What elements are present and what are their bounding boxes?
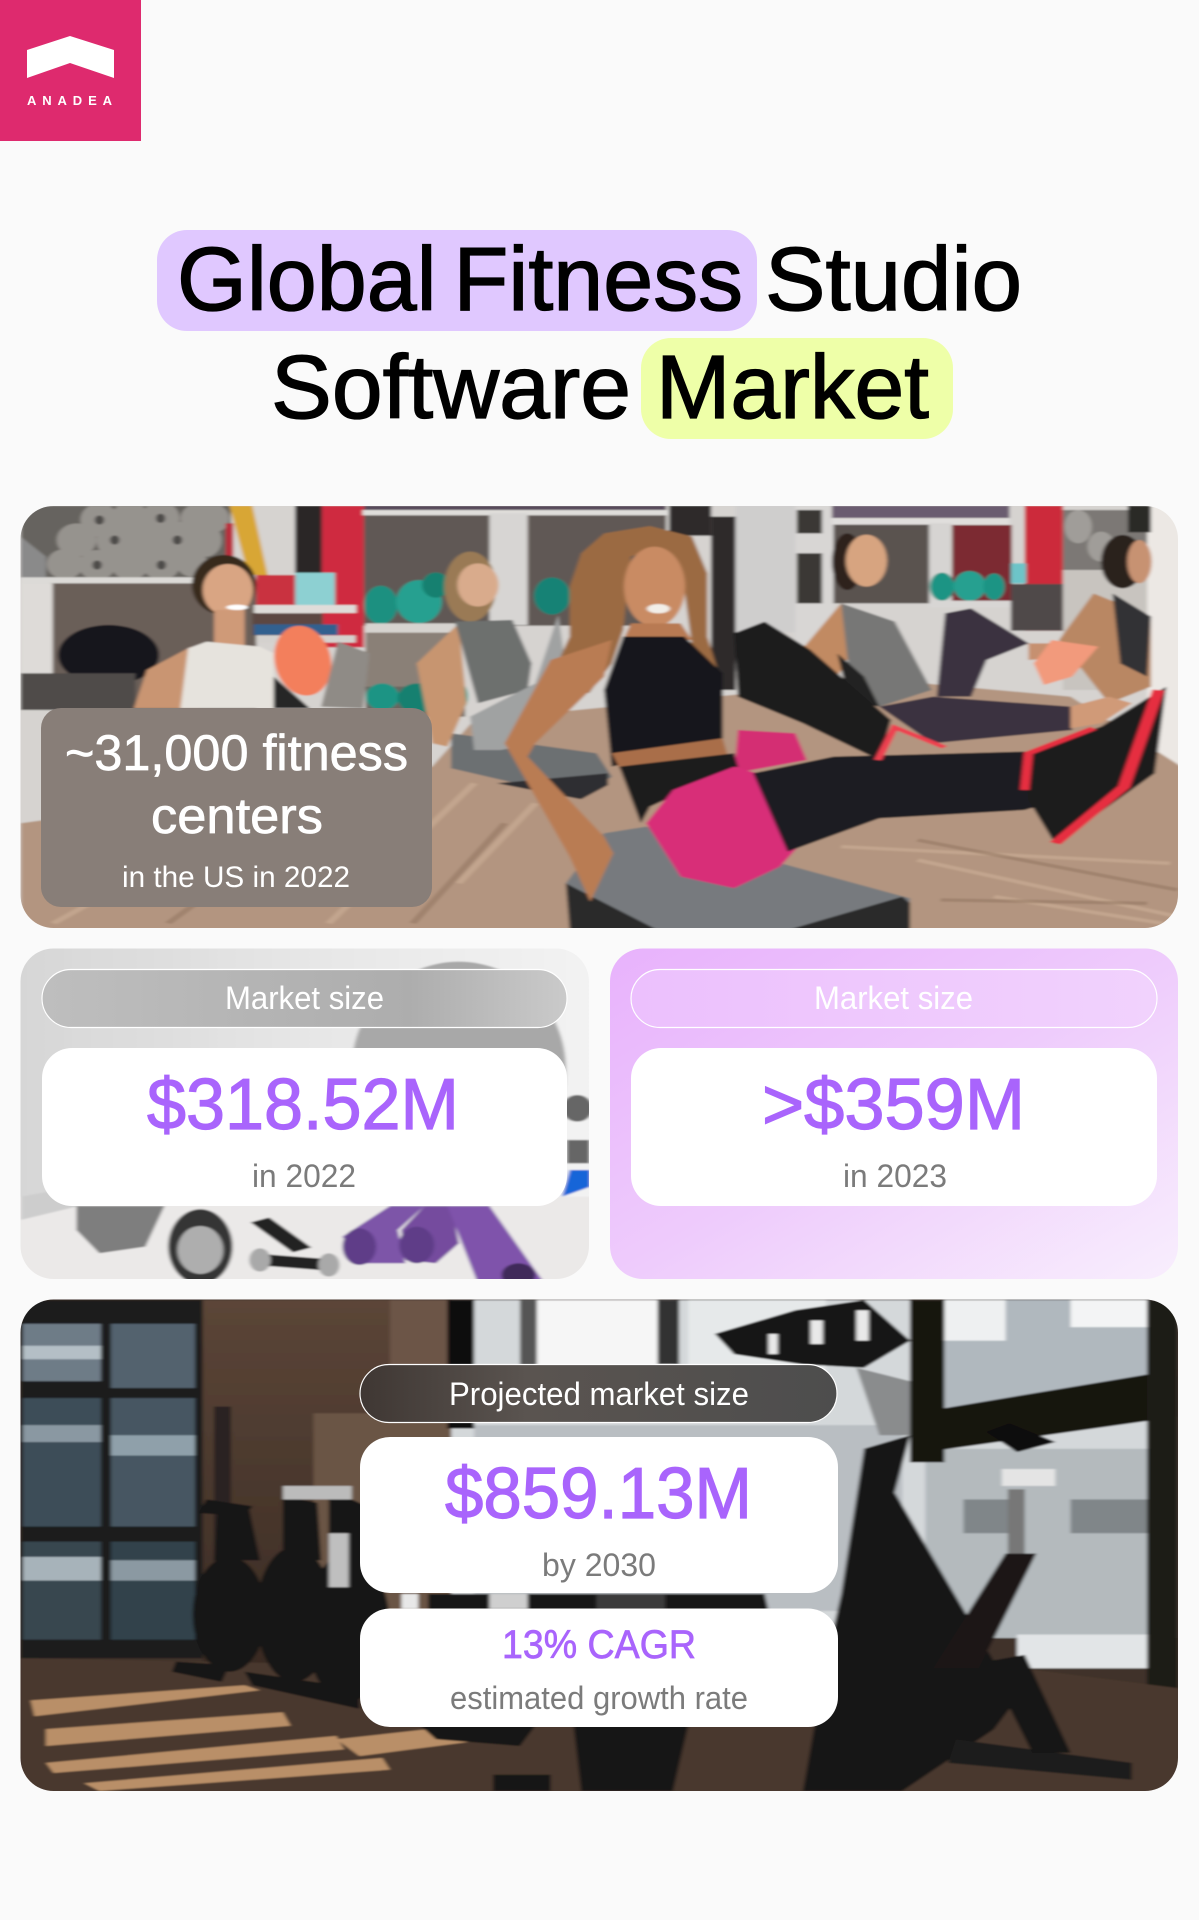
pill: Market size <box>631 970 1157 1028</box>
stat card: 13% CAGR: estimated growth rate <box>450 1680 748 1716</box>
pill: Projected market size <box>360 1364 837 1422</box>
title text <box>177 230 1022 438</box>
caption headline: ~31,000 fitness <box>65 725 408 781</box>
stat card: $859.13M: by 2030 <box>542 1547 656 1583</box>
woman 4 <box>1101 535 1144 588</box>
stat card: 13% CAGR <box>360 1608 838 1727</box>
title text: Global Fitness <box>177 230 743 330</box>
pill: Market size <box>42 970 567 1028</box>
caption subtext: in the US in 2022 <box>122 861 350 894</box>
panel: market size 2023 <box>610 948 1178 1279</box>
woman 1 <box>192 555 256 615</box>
stat card: $318.52M <box>42 1048 567 1206</box>
title <box>157 230 1022 439</box>
photo: group fitness class <box>0 500 1199 933</box>
caption: ~31,000 fitness centers <box>41 708 432 907</box>
title text: Software <box>271 338 631 438</box>
stat card: >$359M <box>631 1048 1157 1206</box>
large bike <box>803 1435 1032 1791</box>
panel: market size 2022 <box>15 947 596 1287</box>
title highlight: lime pill <box>641 338 953 439</box>
title highlight: purple pill <box>157 230 757 331</box>
stat card: >$359M: >$359M <box>762 1065 1025 1145</box>
pill: Projected market size: Projected market size <box>449 1376 749 1412</box>
stat card: >$359M: in 2023 <box>843 1158 947 1194</box>
title text: Studio <box>765 230 1022 330</box>
photo: spin bikes by window <box>0 1297 1199 1797</box>
main woman <box>734 622 891 760</box>
logo: Anadea <box>0 0 141 141</box>
photo: gym equipment <box>15 947 596 1287</box>
pill: Market size: Market size <box>225 980 384 1016</box>
woman 3 <box>803 603 849 677</box>
panel: projected market size photo <box>0 1297 1199 1797</box>
main step <box>566 827 910 930</box>
caption headline <box>65 725 408 844</box>
stat card: $318.52M: in 2022 <box>252 1158 356 1194</box>
stat card: $859.13M: $859.13M <box>445 1454 752 1534</box>
woman 2 step <box>448 733 613 783</box>
caption headline: centers <box>151 788 323 844</box>
title text: Market <box>656 338 929 438</box>
stat card: $318.52M: $318.52M <box>147 1065 459 1145</box>
panel: fitness centers photo <box>0 500 1199 933</box>
pill: Market size: Market size <box>814 980 973 1016</box>
stat card: $859.13M <box>360 1437 838 1593</box>
stat card: 13% CAGR: 13% CAGR <box>502 1623 696 1667</box>
logo: Anadea: ANADEA <box>27 93 113 108</box>
